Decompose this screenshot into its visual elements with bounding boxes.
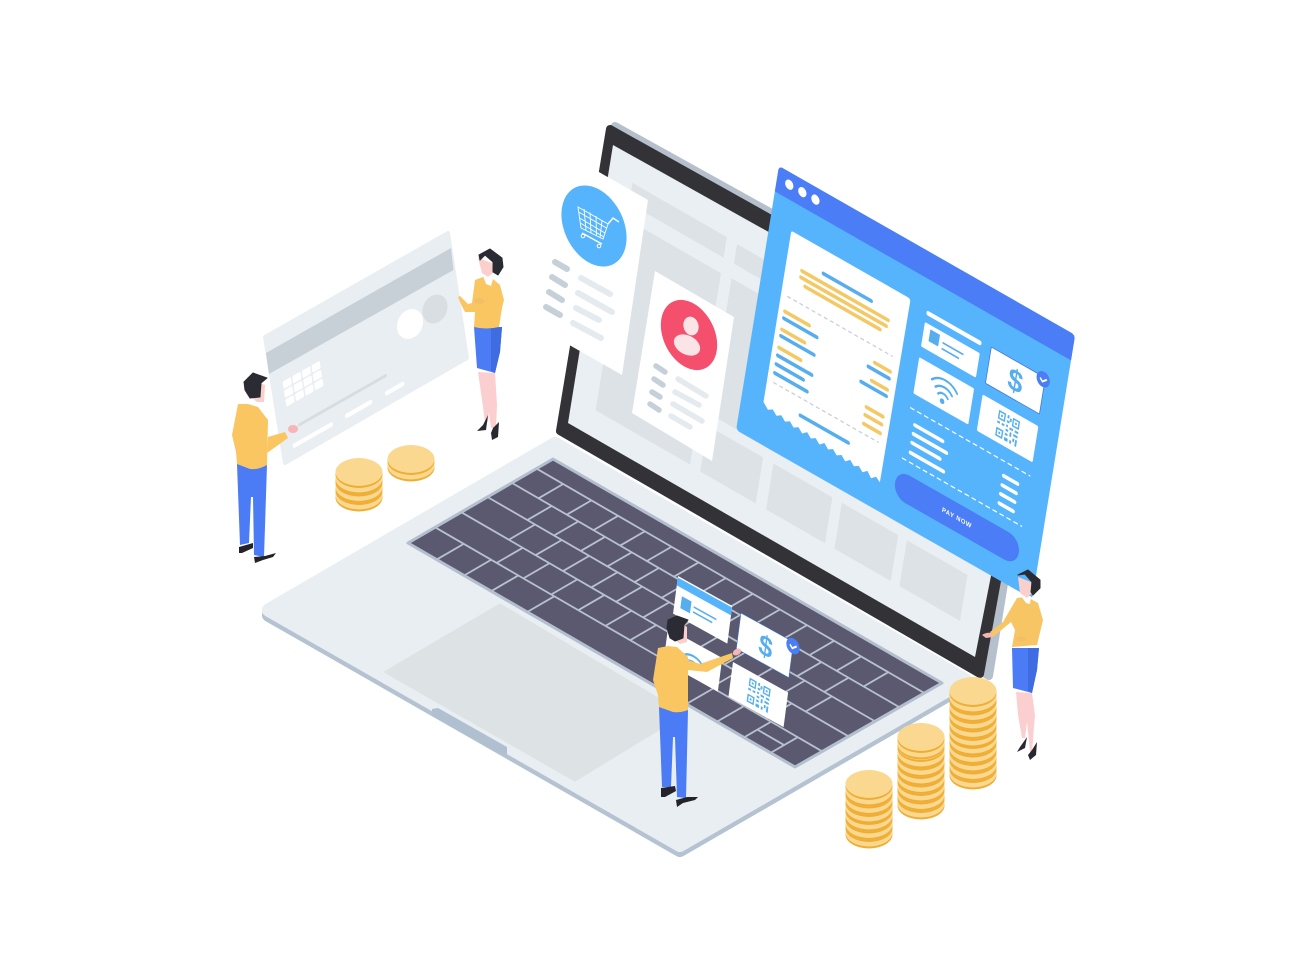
option: QR code	[977, 394, 1038, 462]
card logo circles	[392, 290, 452, 343]
person: man touching floating cards	[653, 616, 742, 807]
panel: payment browser window	[736, 166, 1075, 599]
person: woman beside credit card	[458, 249, 504, 440]
option: card details	[921, 310, 982, 378]
laptop	[269, 126, 1040, 850]
pay now button	[893, 469, 1021, 567]
person: man with credit card	[232, 373, 298, 563]
floating card: dollar: $	[757, 627, 775, 666]
divider lines	[902, 408, 1030, 526]
laptop base side edge	[269, 449, 965, 850]
option: wifi	[913, 357, 974, 425]
icon: user avatar	[656, 288, 722, 382]
trackpad	[386, 605, 683, 780]
option: dollar amount	[985, 342, 1051, 417]
receipt	[761, 231, 911, 484]
floating card: browser	[673, 576, 732, 644]
pay now button: PAY NOW	[941, 507, 972, 530]
credit card	[265, 233, 467, 463]
screen display	[568, 145, 1030, 657]
keyboard	[408, 459, 942, 767]
floating card: QR	[728, 662, 788, 727]
laptop base notch	[432, 708, 507, 755]
person: woman beside window	[982, 570, 1043, 760]
panel: shopping cart card	[543, 155, 648, 375]
icon: cart	[556, 171, 632, 281]
cart detail lines	[546, 262, 612, 338]
screen back edge	[560, 126, 1040, 676]
window title bar	[775, 166, 1075, 360]
coins: right stacks	[846, 677, 996, 848]
option: dollar amount: $	[1005, 361, 1025, 402]
summary lines	[910, 425, 1018, 511]
screen bezel	[560, 129, 1036, 674]
card magnetic stripe	[266, 248, 454, 374]
floating card: wifi	[664, 628, 722, 692]
panel: profile card	[632, 271, 734, 461]
coins: left stacks	[336, 445, 434, 512]
profile detail lines	[650, 366, 706, 427]
laptop base top surface	[269, 444, 965, 845]
floating payment cards	[664, 576, 801, 727]
screen tiles	[595, 183, 997, 621]
card chip and number	[283, 318, 405, 449]
floating card: dollar	[736, 610, 801, 681]
keyboard key separators	[408, 469, 923, 767]
window dots	[784, 178, 820, 207]
